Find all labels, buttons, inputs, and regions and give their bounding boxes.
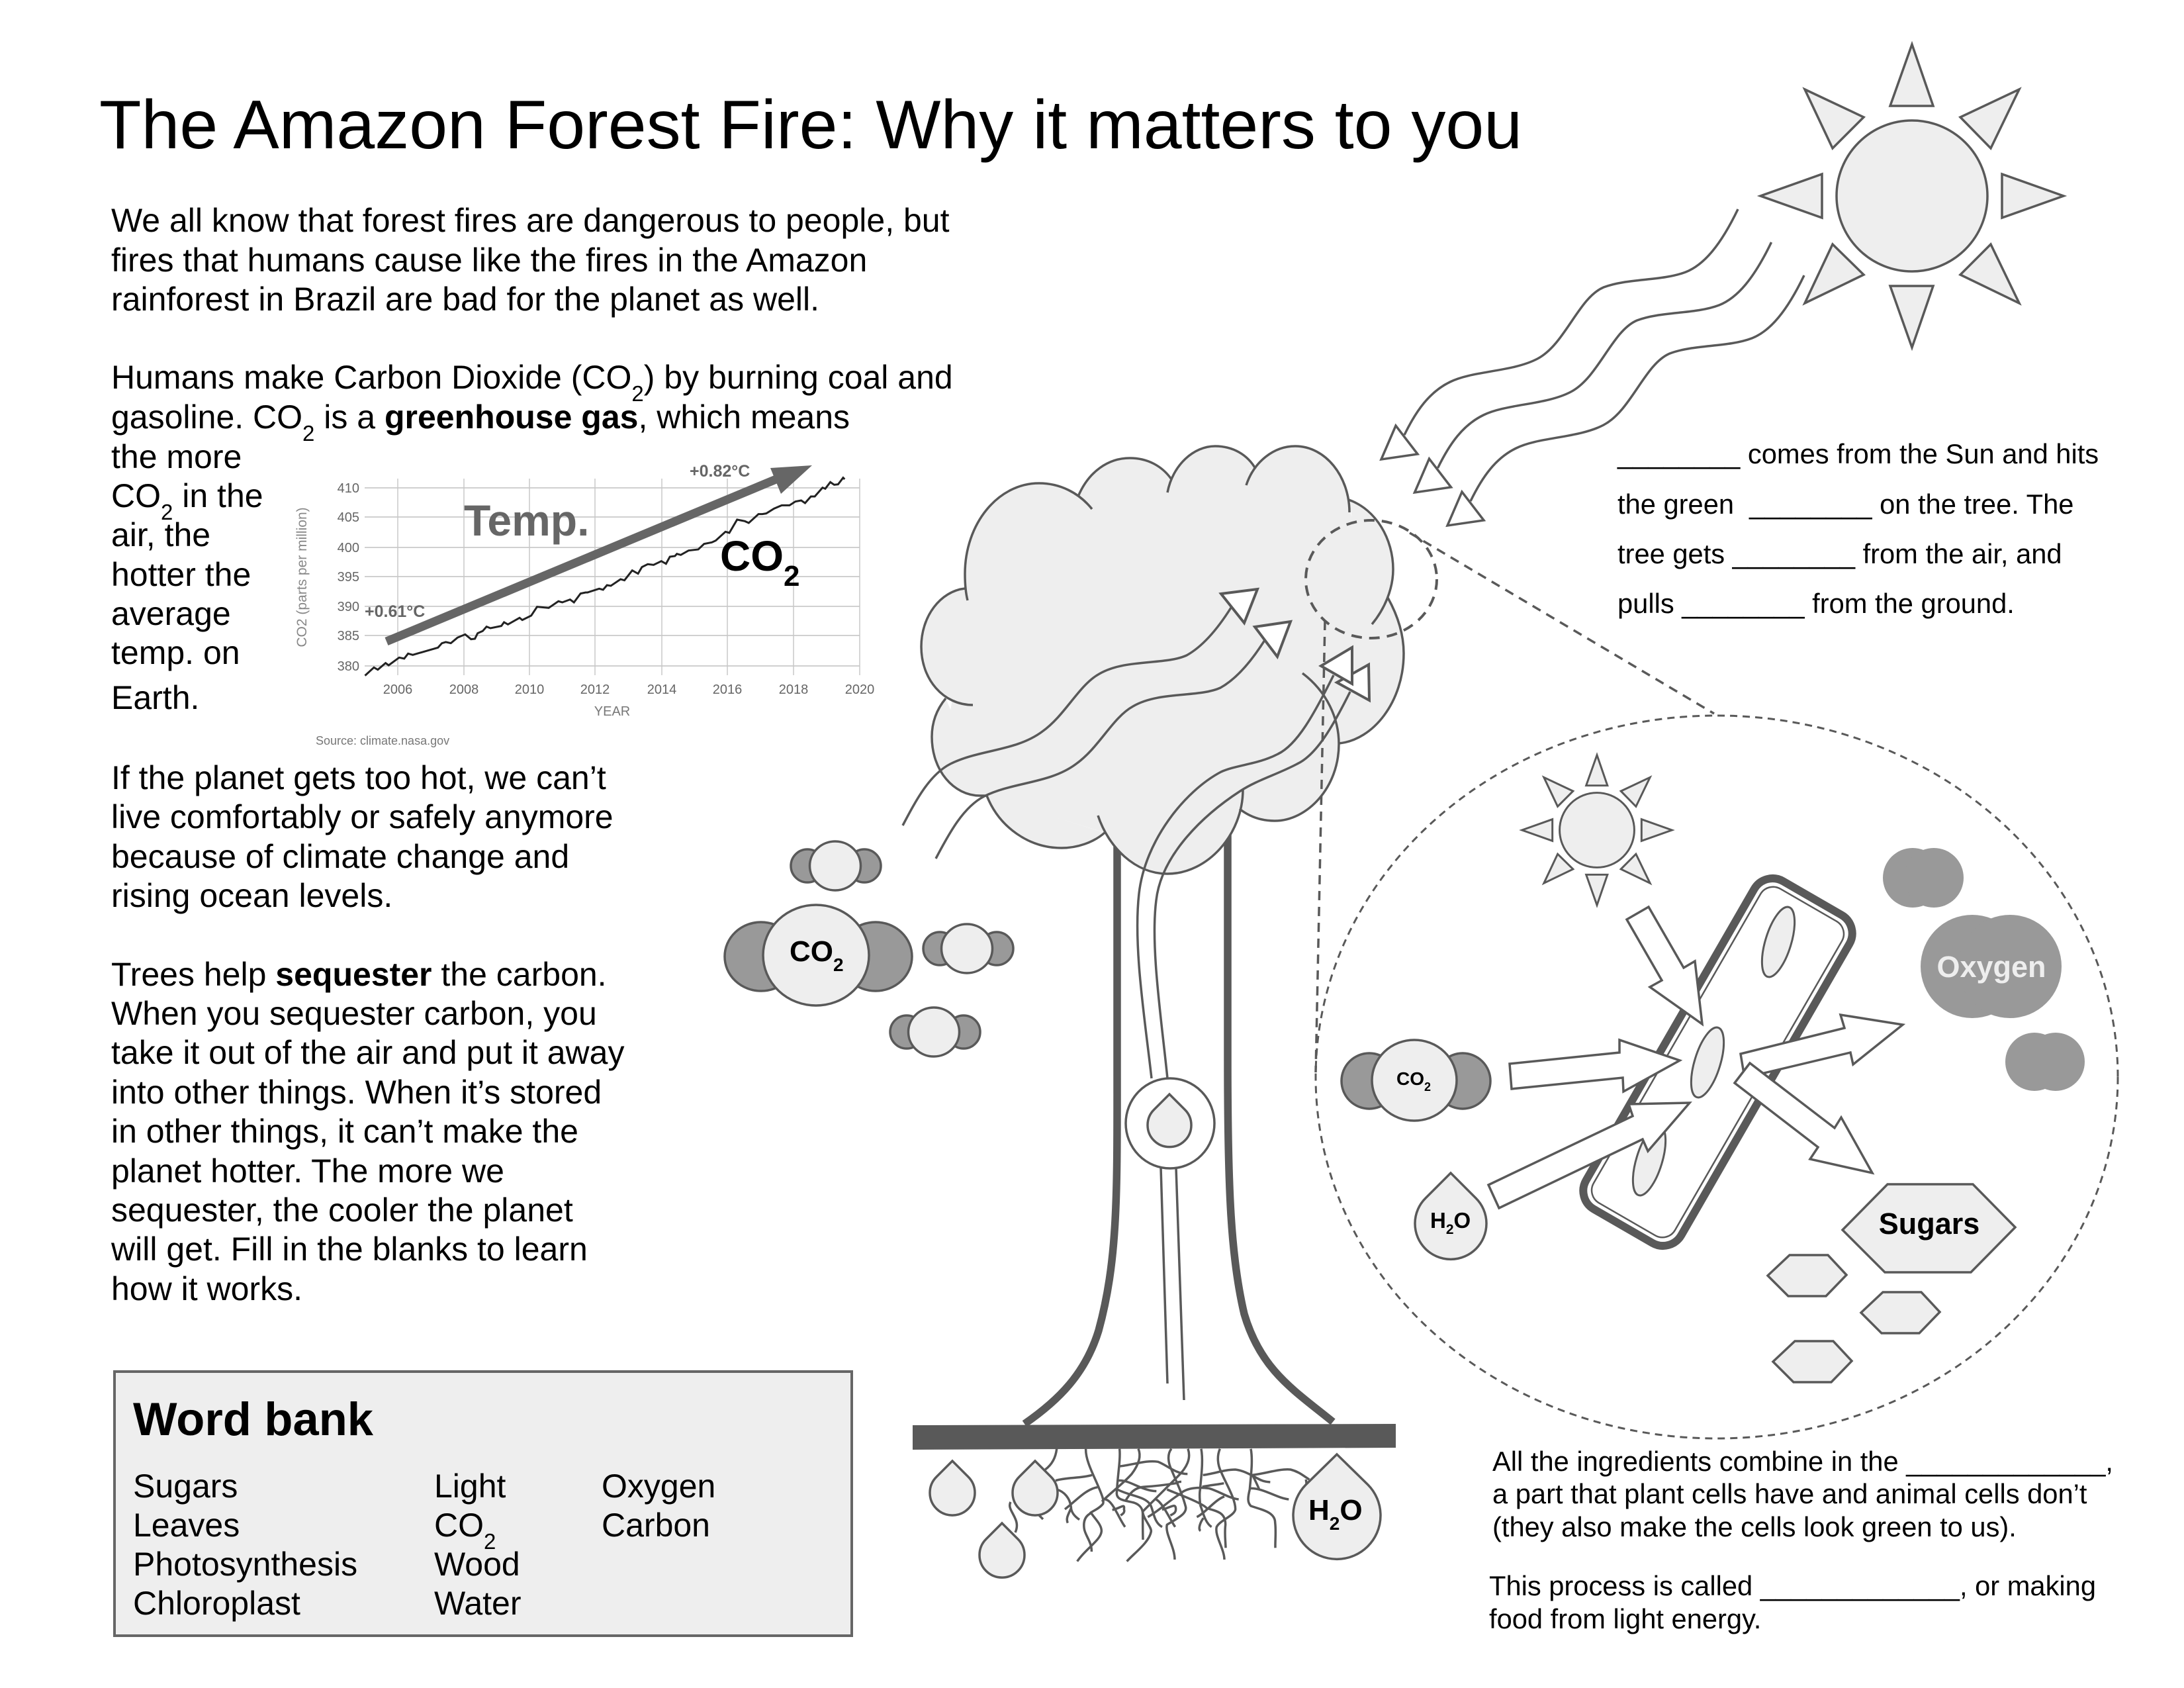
text block: planet gets too hot: live comfortably or safely anymore xyxy=(111,798,614,835)
text block: sequester carbon: take it out of the air and put it away xyxy=(111,1034,624,1071)
text block: photosynthesis blank xyxy=(1489,1570,2096,1634)
text block: greenhouse gas paragraph: average xyxy=(111,595,231,632)
text block: greenhouse gas paragraph: Humans make Carbon Dioxide (CO xyxy=(111,359,631,396)
text block: greenhouse gas paragraph: is a xyxy=(314,399,385,436)
text block: fill in the blanks about the sun xyxy=(1617,438,2099,619)
text block: sequester carbon: When you sequester carbon, you xyxy=(111,995,597,1032)
text block: greenhouse gas paragraph: temp. on xyxy=(111,634,240,671)
word bank heading: Word bank xyxy=(133,1393,374,1445)
text block: fill in the blanks about the sun: ________ comes from the Sun and hits xyxy=(1617,438,2099,469)
title: The Amazon Forest Fire: Why it matters to you xyxy=(99,87,1522,164)
icon: small CO2 molecule 1 xyxy=(791,841,881,890)
word list: Chloroplast xyxy=(133,1585,300,1622)
text block: chloroplast blank: a part that plant cells have and animal cells don’t xyxy=(1492,1478,2087,1509)
ground line xyxy=(913,1424,1396,1450)
word list xyxy=(133,1468,715,1622)
icon: large H2O drop: O xyxy=(1340,1494,1363,1526)
text block: fill in the blanks about the sun: tree gets ________ from the air, and xyxy=(1617,538,2062,569)
line chart: CO2 and temperature: 2020 xyxy=(845,682,874,697)
line chart: CO2 and temperature: 2018 xyxy=(779,682,808,697)
illustration: tree roots xyxy=(1038,1449,1309,1562)
text block: greenhouse gas paragraph: the more xyxy=(111,438,242,475)
icon: CO2 molecule in cell panel: CO xyxy=(1396,1068,1424,1089)
icon: small sun xyxy=(1522,755,1672,905)
line chart: CO2 and temperature: 2008 xyxy=(449,682,478,697)
icon: CO2 molecule in cell panel xyxy=(1342,1040,1490,1121)
text block: chloroplast blank: All the ingredients combine in the _____________, xyxy=(1492,1446,2113,1477)
line chart: CO2 and temperature: 380 xyxy=(338,659,359,674)
text block: planet gets too hot xyxy=(111,759,614,914)
word list: Sugars xyxy=(133,1468,238,1505)
line chart: CO2 and temperature: 395 xyxy=(338,570,359,585)
arrows: water tubes rising through trunk xyxy=(1138,647,1369,1400)
text block: fill in the blanks about the sun: pulls ________ from the ground. xyxy=(1617,588,2015,619)
line chart: CO2 and temperature: 385 xyxy=(338,629,359,643)
line chart: CO2 and temperature: 2 xyxy=(784,560,799,592)
callout: dashed connector lines xyxy=(1316,533,1714,1072)
text block: greenhouse gas paragraph: ) by burning coal and xyxy=(644,359,953,396)
arrow: CO2 into chloroplast xyxy=(1510,1040,1680,1092)
illustration: tree trunk xyxy=(1024,834,1333,1424)
word list: Wood xyxy=(434,1546,520,1583)
text block: greenhouse gas paragraph: greenhouse gas, which means xyxy=(385,399,850,436)
text block: greenhouse gas paragraph: Earth. xyxy=(111,679,199,716)
illustration: tree canopy xyxy=(921,446,1404,874)
text block: intro paragraph xyxy=(111,202,950,318)
text block: intro paragraph: rainforest in Brazil are bad for the planet as well. xyxy=(111,281,819,318)
text block: greenhouse gas paragraph: gasoline. CO xyxy=(111,399,302,436)
icon: small CO2 molecule 3 xyxy=(890,1008,980,1056)
text block: greenhouse gas paragraph xyxy=(111,359,953,716)
panel: word bank xyxy=(114,1372,852,1636)
word list: CO xyxy=(434,1507,484,1544)
text block: sequester carbon: sequester, the cooler the planet xyxy=(111,1192,573,1229)
arrow: water into chloroplast xyxy=(1488,1103,1690,1208)
text block: sequester carbon: into other things. When it’s stored xyxy=(111,1074,602,1111)
line chart: CO2 and temperature: 2006 xyxy=(383,682,412,697)
word list: Oxygen xyxy=(602,1468,715,1505)
icon: small CO2 molecule 2 xyxy=(923,924,1013,973)
text block: sequester carbon: planet hotter. The more we xyxy=(111,1152,504,1190)
line chart: CO2 and temperature: CO xyxy=(720,532,784,580)
text block: greenhouse gas paragraph: 2 xyxy=(302,421,314,445)
text block: intro paragraph: fires that humans cause like the fires in the Amazon xyxy=(111,242,867,279)
icon: H2O drop in cell panel: 2 xyxy=(1446,1222,1454,1237)
icon: oxygen molecules: Oxygen xyxy=(1936,950,2046,984)
icon: large CO2 molecule xyxy=(725,905,912,1006)
line chart: CO2 and temperature: 2010 xyxy=(515,682,544,697)
line chart: CO2 and temperature: Source: climate.nasa.gov xyxy=(316,734,449,747)
word list: Leaves xyxy=(133,1507,240,1544)
word list: 2 xyxy=(484,1529,496,1554)
text block: planet gets too hot: rising ocean levels. xyxy=(111,877,392,914)
line chart: CO2 and temperature: 2012 xyxy=(580,682,610,697)
text block: sequester carbon: will get. Fill in the blanks to learn xyxy=(111,1231,588,1268)
line chart: CO2 and temperature: 400 xyxy=(338,541,359,555)
icon: H2O drop in cell panel xyxy=(1415,1173,1486,1259)
line chart: CO2 and temperature xyxy=(295,462,874,747)
icon: large H2O drop: H xyxy=(1308,1494,1330,1526)
line chart: CO2 and temperature: +0.61°C xyxy=(365,602,425,621)
text block: intro paragraph: We all know that forest fires are dangerous to people, but xyxy=(111,202,950,239)
word list: Carbon xyxy=(602,1507,710,1544)
illustration: plant cell xyxy=(1576,870,1860,1254)
text block: chloroplast blank xyxy=(1492,1446,2113,1542)
arrow: sugars out of chloroplast xyxy=(1735,1063,1872,1173)
text block: greenhouse gas paragraph: air, the xyxy=(111,516,210,553)
text block: planet gets too hot: If the planet gets too hot, we can’t xyxy=(111,759,606,796)
panel: zoomed leaf cell circle xyxy=(1316,716,2118,1438)
icon: large sun xyxy=(1760,44,2064,348)
word list: Photosynthesis xyxy=(133,1546,357,1583)
line chart: CO2 and temperature: 405 xyxy=(338,510,359,525)
line chart: CO2 and temperature: Temp. xyxy=(464,496,589,545)
line chart: CO2 and temperature: CO2 (parts per million) xyxy=(295,507,310,647)
text block: photosynthesis blank: This process is called _____________, or making xyxy=(1489,1570,2096,1601)
icon: large H2O drop: 2 xyxy=(1330,1513,1340,1534)
icon: sugars hexagon: Sugars xyxy=(1879,1207,1979,1241)
icon: large CO2 molecule: CO xyxy=(790,935,833,968)
text block: greenhouse gas paragraph: hotter the xyxy=(111,556,251,593)
icons: small sugar hexagons xyxy=(1768,1255,1940,1382)
callout: dashed zoom circle on canopy xyxy=(1306,520,1437,638)
text block: sequester carbon: how it works. xyxy=(111,1270,302,1307)
text block: sequester carbon: Trees help sequester the carbon. xyxy=(111,956,607,993)
word list: Water xyxy=(434,1585,522,1622)
arrows: sunlight rays to the tree xyxy=(1381,209,1804,526)
line chart: CO2 and temperature: 2016 xyxy=(713,682,742,697)
line chart: CO2 and temperature: +0.82°C xyxy=(690,462,750,481)
text block: greenhouse gas paragraph: 2 xyxy=(631,381,644,406)
line chart: CO2 and temperature: 410 xyxy=(338,481,359,496)
line chart: CO2 and temperature: YEAR xyxy=(594,704,630,719)
text block: greenhouse gas paragraph: CO xyxy=(111,477,161,514)
arrow: light into chloroplast xyxy=(1627,907,1702,1024)
word list: Light xyxy=(434,1468,506,1505)
line chart: CO2 and temperature: 2014 xyxy=(647,682,676,697)
arrows: carbon dioxide entering canopy xyxy=(903,589,1291,859)
icon: sugars hexagon xyxy=(1843,1184,2015,1272)
text block: photosynthesis blank: food from light energy. xyxy=(1489,1603,1761,1634)
text block: chloroplast blank: (they also make the cells look green to us). xyxy=(1492,1511,2017,1542)
icon: water drop in trunk circle xyxy=(1126,1078,1214,1168)
icon: H2O drop in cell panel: O xyxy=(1454,1208,1471,1233)
icon: CO2 molecule in cell panel: 2 xyxy=(1424,1080,1431,1094)
icons: small water drops in soil xyxy=(930,1461,1058,1577)
text block: planet gets too hot: because of climate change and xyxy=(111,838,569,875)
icon: large CO2 molecule: 2 xyxy=(833,955,844,975)
text block: sequester carbon xyxy=(111,956,624,1307)
icon: oxygen molecules xyxy=(1883,848,2085,1091)
text block: greenhouse gas paragraph: 2 xyxy=(161,500,173,524)
chloroplasts in the cell xyxy=(1626,904,1801,1199)
line chart: CO2 and temperature: 390 xyxy=(338,600,359,614)
icon: large H2O drop xyxy=(1293,1454,1381,1559)
icon: H2O drop in cell panel: H xyxy=(1430,1208,1446,1233)
text block: sequester carbon: in other things, it can’t make the xyxy=(111,1113,578,1150)
arrow: oxygen out of chloroplast xyxy=(1741,1015,1903,1078)
text block: fill in the blanks about the sun: the green ________ on the tree. The xyxy=(1617,489,2073,520)
text block: greenhouse gas paragraph: in the xyxy=(173,477,263,514)
